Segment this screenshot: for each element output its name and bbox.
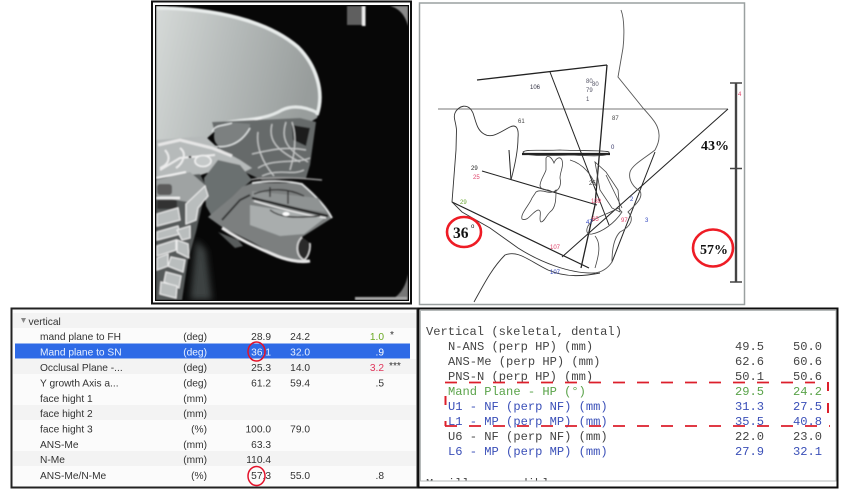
table: row ANS-Me/N-Me: 55.0 — [290, 471, 310, 482]
table: row Occlusal Plane: 14.0 — [290, 363, 310, 374]
table: row Mand plane to SN: (deg) — [183, 348, 207, 358]
table: row mand plane to FH — [40, 330, 394, 343]
report: row U6 — [448, 430, 822, 444]
table: row Y growth Axis: Y growth Axis a... — [40, 378, 119, 390]
table: row Y growth Axis: 59.4 — [290, 378, 310, 390]
tracing: measurement labels: 97 — [621, 218, 628, 224]
table: row ANS-Me: 63.3 — [251, 440, 271, 451]
tracing: measurement labels: 65 — [592, 217, 599, 223]
x-ray: cranium — [156, 6, 321, 144]
table: row face hight 1: (mm) — [183, 394, 207, 405]
tracing: molars and incisors — [522, 156, 622, 268]
x-ray: skull base — [156, 137, 252, 178]
report: row L1: 35.5 — [735, 415, 764, 429]
table: row N-Me: 110.4 — [246, 455, 271, 466]
table: row N-Me — [40, 455, 271, 466]
tracing: measurement labels: 29 — [460, 200, 467, 206]
table: row face hight 3: face hight 3 — [40, 424, 93, 436]
table: row mand plane to FH: mand plane to FH — [40, 332, 121, 343]
report: row L1: 40.8 — [793, 415, 822, 429]
report: row Mand Plane: Mand Plane - HP (°) — [448, 385, 586, 399]
table: row N-Me: N-Me — [40, 455, 65, 466]
tracing: measurement labels: 106 — [530, 85, 541, 91]
callout: red dashed highlight box — [445, 382, 830, 426]
report: row N-ANS: N-ANS (perp HP) (mm) — [448, 340, 593, 354]
report: row U6: U6 - NF (perp NF) (mm) — [448, 430, 608, 444]
report: row ANS-Me — [448, 355, 822, 369]
report: row U6: 23.0 — [793, 430, 822, 444]
report: clipped next heading: Maxilla - mandible — [426, 477, 557, 491]
table: row mand plane to FH: 24.2 — [290, 332, 310, 343]
report: row U1 — [448, 400, 822, 414]
x-ray: neck soft tissue — [190, 240, 212, 300]
table: row Y growth Axis: 61.2 — [251, 378, 271, 390]
table: row Mand plane to SN: Mand plane to SN — [40, 348, 122, 358]
table: row mand plane to FH: * — [390, 330, 394, 341]
table: row ANS-Me/N-Me: 57.3 — [251, 471, 271, 482]
table: row Occlusal Plane: *** — [389, 361, 401, 372]
tracing: measurement labels: 107 — [550, 245, 561, 251]
table: row ANS-Me: (mm) — [183, 440, 207, 451]
callout: circle around 36 — [248, 342, 265, 361]
tracing: measurement labels: 3 — [645, 218, 649, 224]
table: row ANS-Me: ANS-Me — [40, 440, 79, 451]
table: row Mand plane to SN: .9 — [376, 348, 384, 358]
report: row U1: 31.3 — [735, 400, 764, 414]
table: row Occlusal Plane — [40, 361, 401, 374]
table: row face hight 3: 100.0 — [246, 424, 271, 436]
tracing: measurement labels — [460, 79, 742, 276]
tracing: vertical proportion bar — [730, 83, 742, 282]
table: row face hight 3 — [40, 424, 310, 436]
tracing: measurement labels: 0 — [611, 145, 615, 151]
callout: 36 degrees — [447, 217, 481, 247]
x-ray: mandible and teeth — [208, 181, 332, 262]
tracing: measurement labels: 25 — [589, 181, 596, 187]
table: row Mand plane to SN — [40, 348, 384, 358]
callout: circle around 57 — [248, 466, 265, 486]
table: row face hight 1: face hight 1 — [40, 394, 93, 405]
report: row PNS-N: PNS-N (perp HP) (mm) — [448, 370, 593, 384]
table: row face hight 2 — [40, 409, 207, 420]
table: row face hight 3: (%) — [191, 424, 207, 436]
tracing: measurement labels: 87 — [612, 116, 619, 122]
report: row N-ANS: 50.0 — [793, 340, 822, 354]
tracing: soft tissue profile — [595, 10, 659, 273]
report: heading: Vertical (skeletal, dental) — [426, 325, 622, 339]
report: row L1: L1 - MP (perp MP) (mm) — [448, 415, 608, 429]
tracing: measurement labels: 47 — [586, 220, 593, 226]
table: section heading: vertical — [28, 317, 61, 328]
panel: vertical skeletal dental report — [418, 308, 838, 491]
report: row ANS-Me: 62.6 — [735, 355, 764, 369]
table: row face hight 3: 79.0 — [290, 424, 310, 436]
tracing: skeletal lines — [452, 65, 728, 268]
table: row face hight 2: face hight 2 — [40, 409, 93, 420]
table: row Mand plane to SN: 36.1 — [251, 348, 271, 358]
tracing: measurement labels: 80 — [586, 79, 593, 85]
callout: 57 percent — [693, 230, 733, 266]
x-ray: pharyngeal region — [204, 160, 252, 220]
table: row Occlusal Plane: Occlusal Plane -... — [40, 363, 123, 374]
table: row Y growth Axis: (deg) — [183, 378, 207, 390]
report: row Mand Plane: 29.5 — [735, 385, 764, 399]
table: row ANS-Me/N-Me — [40, 471, 384, 482]
tracing: measurement labels: 1 — [586, 97, 590, 103]
panel: lateral skull x-ray — [152, 2, 411, 304]
x-ray: facial bones — [212, 118, 322, 180]
tracing: measurement labels: 80 — [592, 82, 599, 88]
report: row L1 — [448, 415, 822, 429]
table: row mand plane to FH: (deg) — [183, 332, 207, 343]
table: row ANS-Me — [40, 440, 271, 451]
x-ray: cervical vertebrae — [156, 172, 208, 300]
table: row Occlusal Plane: 3.2 — [370, 363, 384, 374]
report: row Mand Plane — [448, 385, 822, 399]
callout: 36 degrees: o — [471, 224, 475, 230]
tracing: measurement labels: 107 — [550, 270, 561, 276]
table: selected row highlight — [15, 344, 410, 358]
report: row U6: 22.0 — [735, 430, 764, 444]
report: row N-ANS — [448, 340, 822, 354]
table: row mand plane to FH: 28.9 — [251, 332, 271, 343]
report: row L6: 27.9 — [735, 445, 764, 459]
tracing: measurement labels: 2 — [630, 197, 634, 203]
report: row U1: U1 - NF (perp NF) (mm) — [448, 400, 608, 414]
table: row Occlusal Plane: 25.3 — [251, 363, 271, 374]
x-ray: ruler marker — [347, 6, 366, 26]
tracing: measurement labels: 29 — [471, 166, 478, 172]
report: row L6: 32.1 — [793, 445, 822, 459]
report: row ANS-Me: ANS-Me (perp HP) (mm) — [448, 355, 600, 369]
table: row Mand plane to SN: 32.0 — [290, 348, 310, 358]
callout: 36 degrees: 36 — [453, 225, 469, 242]
tracing: horizontal reference line — [438, 108, 728, 110]
table: row N-Me: (mm) — [183, 455, 207, 466]
report: row L6: L6 - MP (perp MP) (mm) — [448, 445, 608, 459]
table: row ANS-Me/N-Me: .8 — [376, 471, 384, 482]
table: row Y growth Axis — [40, 378, 384, 390]
panel: vertical measurements table — [12, 308, 418, 488]
table: row Occlusal Plane: (deg) — [183, 363, 207, 374]
table: row mand plane to FH: 1.0 — [370, 332, 384, 343]
tracing: mandible outline — [452, 106, 609, 302]
report: row U1: 27.5 — [793, 400, 822, 414]
tracing: measurement labels: 4 — [738, 92, 742, 98]
report: row L6 — [448, 445, 822, 459]
callout: 57 percent: 57% — [700, 243, 728, 258]
panel: cephalometric tracing — [420, 3, 744, 304]
tracing: measurement labels: 25 — [473, 175, 480, 181]
report: row Mand Plane: 24.2 — [793, 385, 822, 399]
table: row Y growth Axis: .5 — [376, 378, 384, 390]
tracing: measurement labels: 61 — [518, 119, 525, 125]
report: row PNS-N: 50.6 — [793, 370, 822, 384]
report: row ANS-Me: 60.6 — [793, 355, 822, 369]
label: 43 percent: 43% — [701, 139, 729, 154]
report: row PNS-N: 50.1 — [735, 370, 764, 384]
table: row ANS-Me/N-Me: ANS-Me/N-Me — [40, 471, 107, 482]
report: row PNS-N — [448, 370, 822, 384]
tracing: measurement labels: 139 — [591, 199, 602, 205]
table: row face hight 2: (mm) — [183, 409, 207, 420]
table: row face hight 1 — [40, 394, 207, 405]
report: row N-ANS: 49.5 — [735, 340, 764, 354]
tracing: measurement labels: 79 — [586, 88, 593, 94]
table: row ANS-Me/N-Me: (%) — [191, 471, 207, 482]
